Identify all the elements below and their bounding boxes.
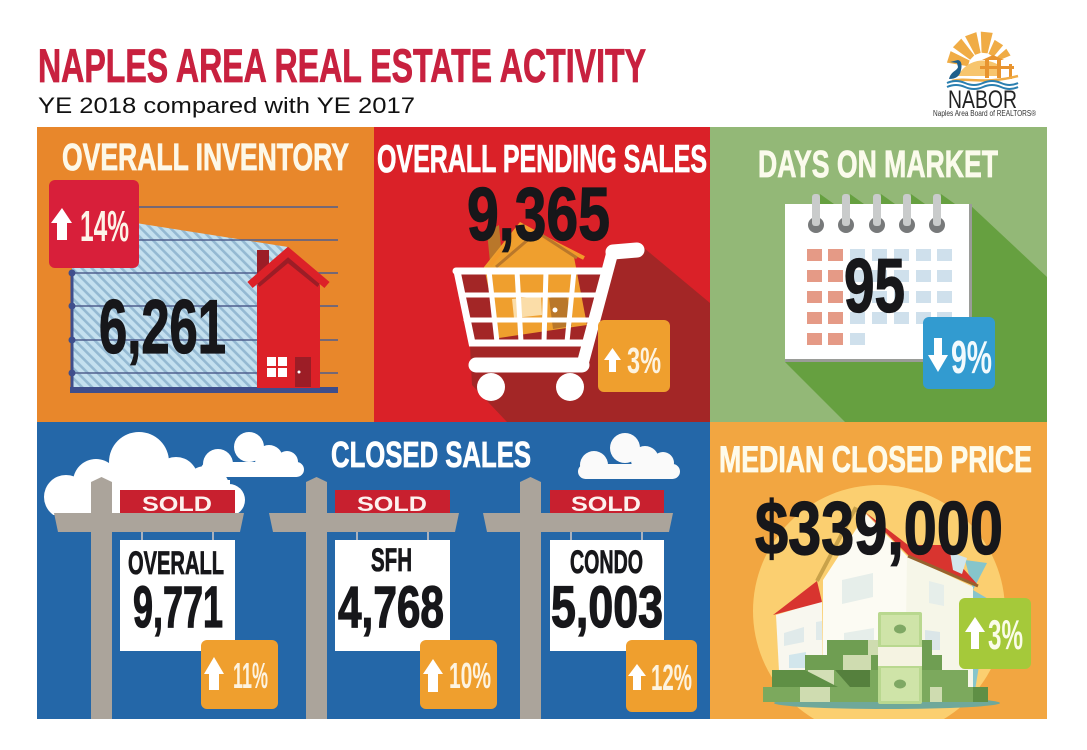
calendar shadow [785, 204, 1047, 422]
icon: shopping cart [456, 250, 637, 401]
sun circle [753, 485, 1005, 737]
panel: days on market [710, 127, 1047, 422]
inventory area chart [68, 207, 338, 393]
icon: red house [250, 250, 327, 388]
panel: overall inventory [37, 127, 374, 422]
sold sign: SFH: 10% [449, 655, 491, 696]
inventory change badge: 14% [80, 202, 129, 251]
inventory heading: OVERALL INVENTORY [62, 137, 349, 179]
pending value: 9,365 [467, 172, 610, 256]
panel: median closed price [710, 422, 1047, 737]
closed sales heading: CLOSED SALES [331, 434, 531, 475]
sold sign: overall: SOLD [142, 493, 212, 516]
pending change badge: 3% [627, 340, 661, 381]
icon: money piles [763, 612, 1000, 709]
sold sign: overall [54, 477, 278, 719]
sold sign: overall: 11% [233, 655, 268, 696]
days change badge: 9% [951, 331, 992, 383]
sold sign: overall: OVERALL [128, 545, 224, 581]
days value: 95 [844, 244, 905, 329]
logo: NABOR: NABOR [948, 86, 1017, 114]
price change badge: 3% [988, 611, 1023, 658]
sold sign: overall: 9,771 [133, 575, 223, 640]
sold sign: condo: SOLD [571, 493, 641, 516]
icon: house [773, 509, 990, 690]
price value: $339,000 [755, 486, 1003, 570]
panel: closed sales [37, 422, 710, 719]
sold sign: SFH [269, 477, 497, 719]
logo: NABOR [933, 32, 1036, 118]
inventory change badge [49, 180, 139, 268]
sold sign: condo [483, 477, 697, 719]
icon: calendar [785, 194, 972, 362]
sold sign: SFH: SOLD [357, 493, 427, 516]
cloud: small middle [201, 432, 304, 479]
cloud: small right [578, 433, 680, 479]
title: NAPLES AREA REAL ESTATE ACTIVITY [38, 39, 646, 92]
days change badge [923, 317, 995, 389]
sold sign: condo: 12% [651, 657, 692, 698]
pending heading: OVERALL PENDING SALES [377, 138, 707, 181]
sold sign: condo: CONDO [570, 544, 643, 580]
sold sign: condo: 5,003 [551, 575, 663, 640]
sold sign: SFH: SFH [371, 542, 412, 578]
subtitle: YE 2018 compared with YE 2017 [38, 93, 415, 118]
sold sign: SFH: 4,768 [338, 575, 444, 640]
pending change badge [598, 320, 670, 392]
logo: NABOR: Naples Area Board of REALTORS® [933, 109, 1036, 118]
inventory value: 6,261 [99, 285, 226, 370]
cloud: large left [44, 432, 245, 519]
icon: house tag in cart [484, 222, 587, 338]
price change badge [959, 598, 1031, 669]
panel: overall pending sales [374, 127, 710, 422]
cart shadow [456, 243, 710, 422]
